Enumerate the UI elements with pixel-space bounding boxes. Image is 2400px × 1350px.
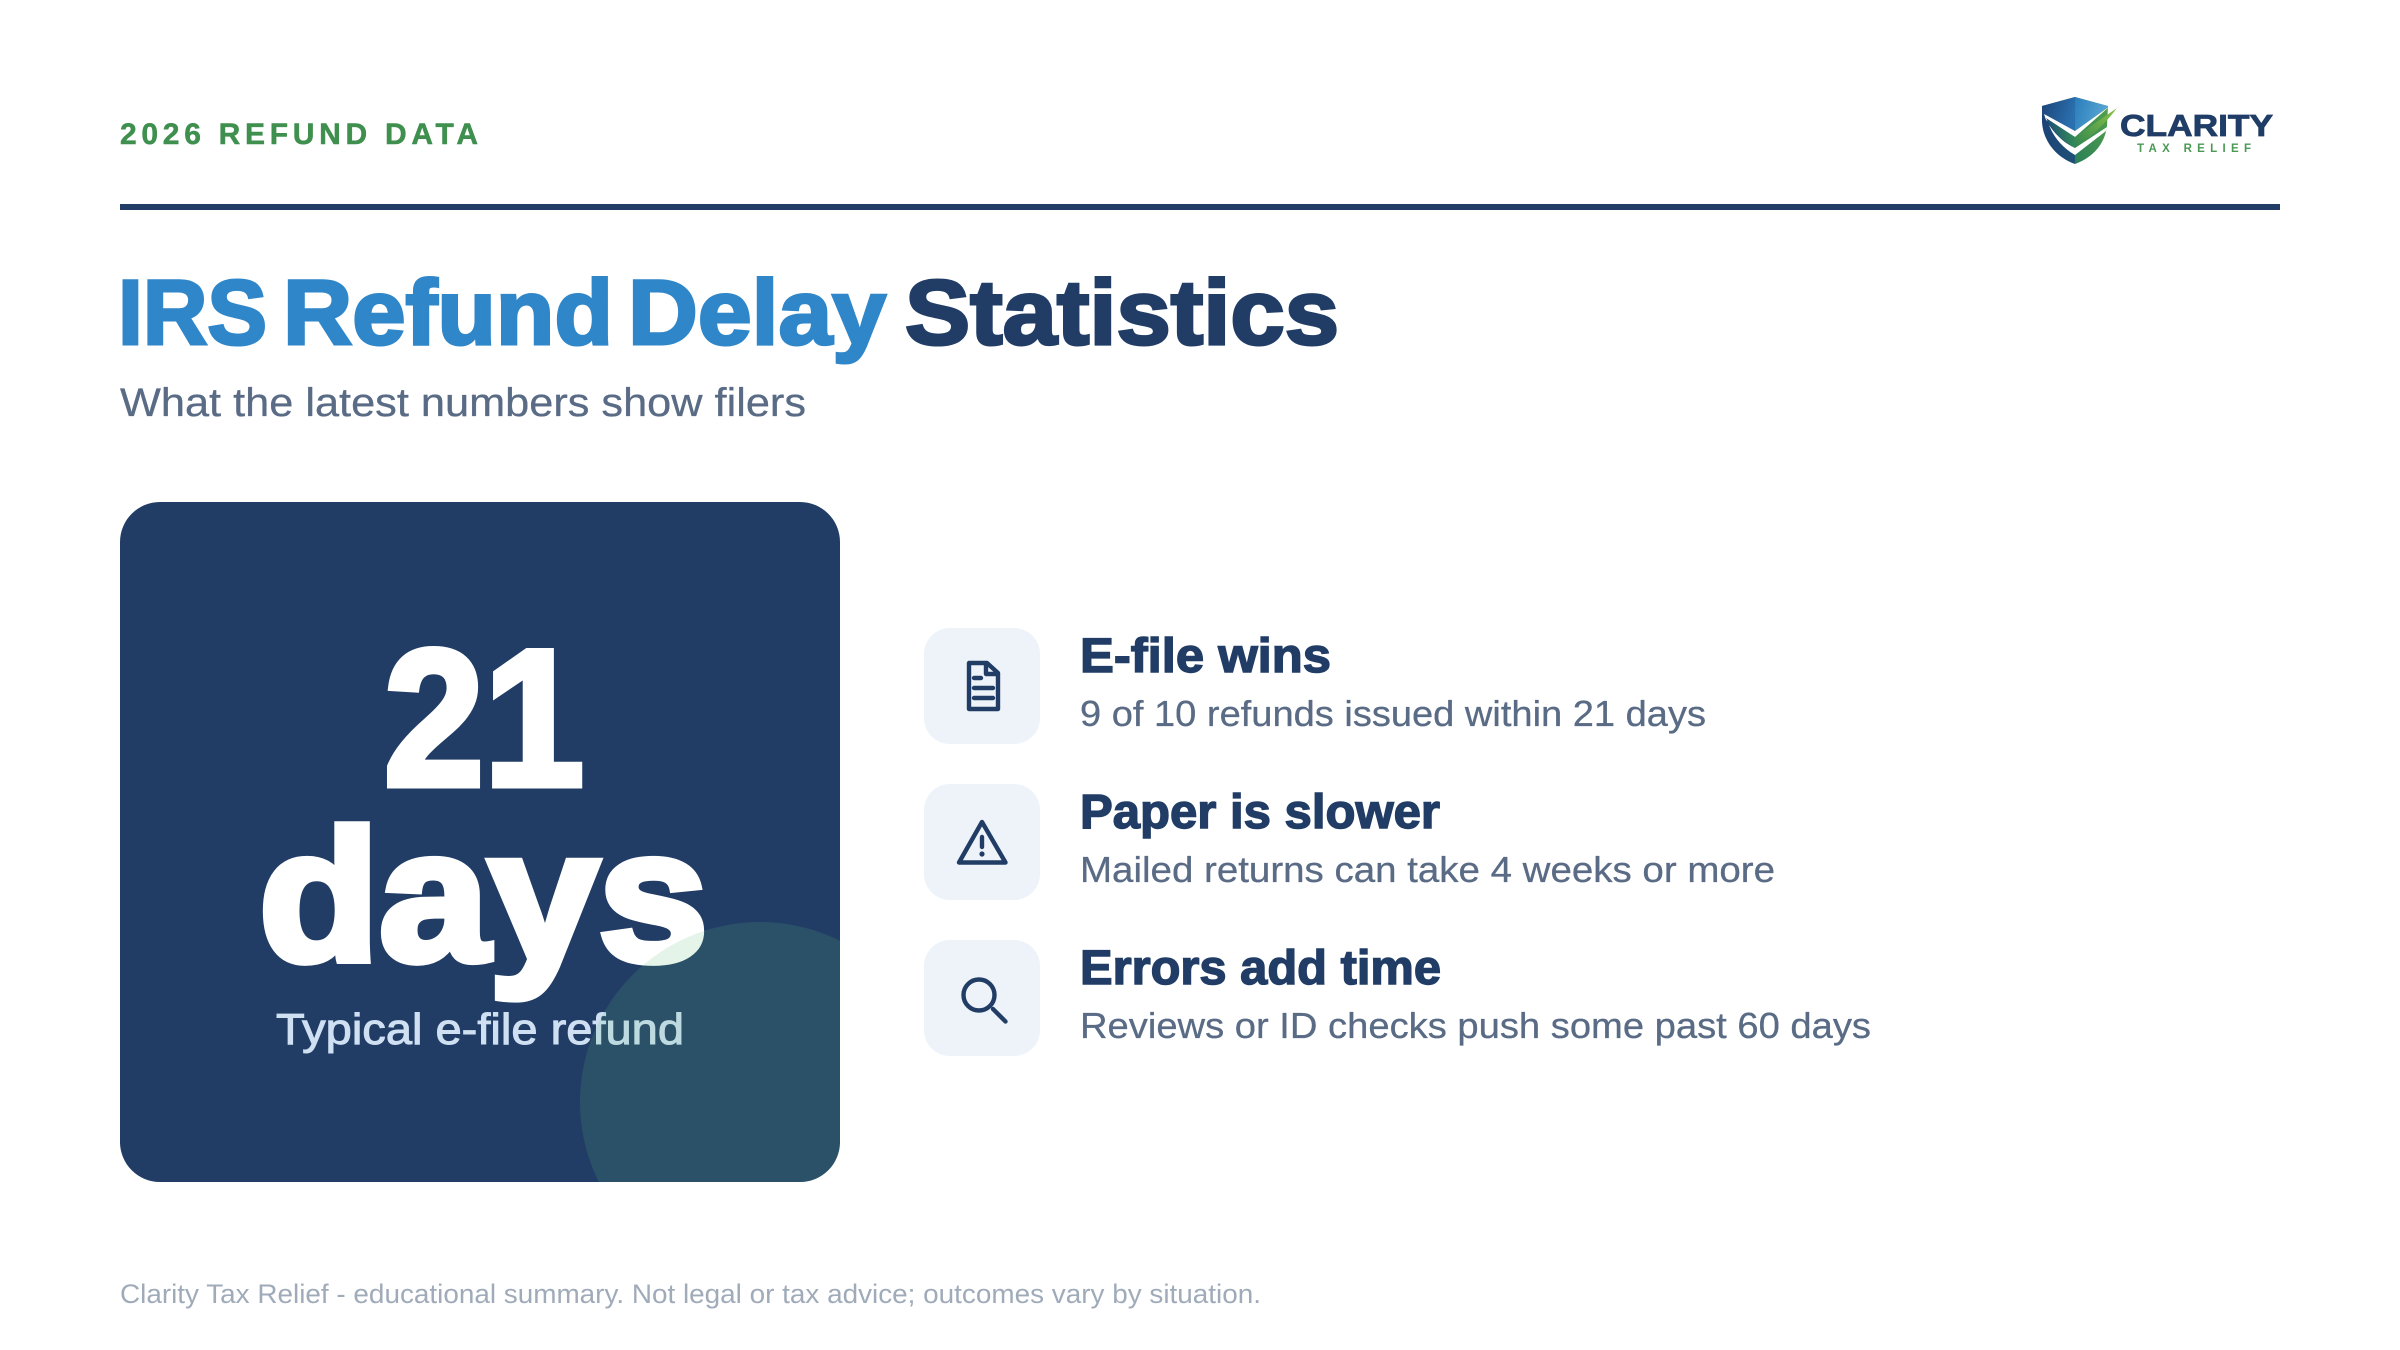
heading: Paper is slower [1080, 786, 1440, 839]
big unit: days: days [259, 793, 708, 1000]
panel: hero stat card [120, 502, 840, 1182]
title: Delay [628, 262, 886, 364]
title: IRS [118, 262, 267, 364]
item: e-file wins [924, 628, 1706, 744]
icon: shield with check mark [2042, 97, 2117, 164]
card background [120, 502, 840, 1182]
item: errors add time [924, 940, 1871, 1056]
decorative circle [580, 922, 840, 1182]
title: Statistics [905, 262, 1339, 364]
icon tile: magnifier [924, 940, 1040, 1056]
description: Mailed returns can take 4 weeks or more [1080, 849, 1775, 890]
big number: 21: 21 [384, 610, 584, 827]
heading: Errors add time [1080, 942, 1441, 995]
icon tile: warning triangle [924, 784, 1040, 900]
card caption: Typical e-file refund [276, 1005, 684, 1054]
heading: E-file wins [1080, 630, 1331, 683]
item: paper is slower [924, 784, 1775, 900]
logo tagline: TAX RELIEF [2137, 143, 2251, 155]
logo: Clarity Tax Relief [2042, 97, 2273, 164]
kicker: 2026 refund data: 2026 REFUND DATA [120, 118, 478, 151]
description: Reviews or ID checks push some past 60 days [1080, 1005, 1871, 1046]
icon tile: document [924, 628, 1040, 744]
title: Refund [283, 262, 613, 364]
logo wordmark: CLARITY [2120, 108, 2273, 143]
subtitle: What the latest numbers show filers [120, 381, 806, 425]
title [118, 262, 1339, 364]
footer disclaimer: Clarity Tax Relief - educational summary. Not legal or tax advice; outcomes vary by situation. [120, 1279, 1261, 1309]
header rule [120, 204, 2280, 210]
description: 9 of 10 refunds issued within 21 days [1080, 693, 1706, 734]
